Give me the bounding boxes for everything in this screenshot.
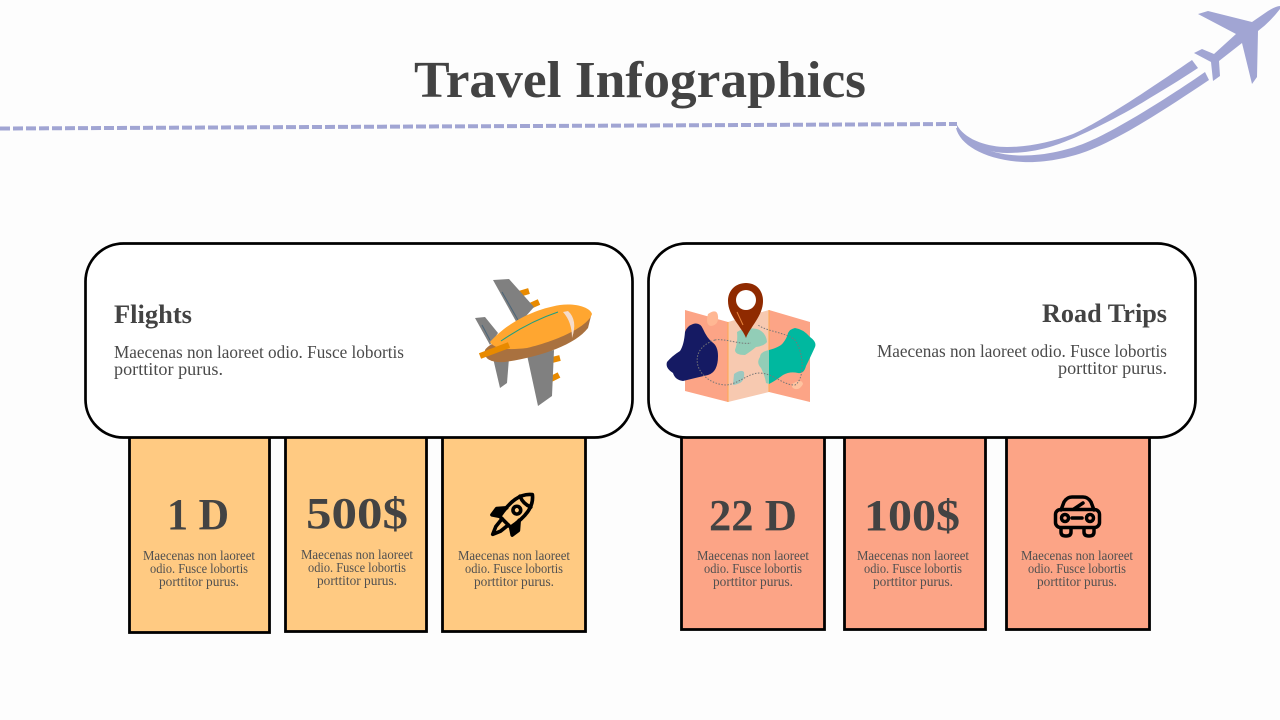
card: rocket: Maecenas non laoreet bbox=[458, 548, 570, 563]
icon: map with pin bbox=[667, 283, 815, 402]
card: 22 D: Maecenas non laoreet bbox=[697, 548, 809, 563]
card: 22 D: odio. Fusce lobortis bbox=[704, 561, 802, 576]
card: 1 D: 1 D bbox=[167, 490, 229, 539]
lower trail bbox=[956, 72, 1209, 162]
card: car: Maecenas non laoreet bbox=[1021, 548, 1133, 563]
text: road trips description bbox=[877, 341, 1167, 378]
card: 500$: odio. Fusce lobortis bbox=[308, 560, 406, 575]
card: 100$: odio. Fusce lobortis bbox=[864, 561, 962, 576]
text: flights description: porttitor purus. bbox=[114, 359, 223, 379]
card: 22 D bbox=[682, 437, 824, 630]
card: 1 D: Maecenas non laoreet bbox=[143, 548, 255, 563]
card: 500$: Maecenas non laoreet bbox=[301, 547, 413, 562]
text: flights description: Maecenas non laoreet odio. Fusce lobortis bbox=[114, 342, 404, 362]
card: 22 D: porttitor purus. bbox=[713, 574, 793, 589]
cards: road trips bbox=[682, 437, 1150, 630]
text: road trips description: Maecenas non laoreet odio. Fusce lobortis bbox=[877, 341, 1167, 361]
card: 22 D: 22 D bbox=[709, 491, 797, 540]
icon: location pin bbox=[728, 283, 763, 338]
cards: flights bbox=[130, 437, 586, 632]
card: 1 D bbox=[130, 437, 270, 632]
card: 100$: Maecenas non laoreet bbox=[857, 548, 969, 563]
panel: road trips bbox=[648, 244, 1196, 438]
title: Travel Infographics bbox=[414, 52, 866, 109]
card: rocket: porttitor purus. bbox=[474, 574, 554, 589]
card: car bbox=[1006, 437, 1150, 630]
card: 1 D: odio. Fusce lobortis bbox=[150, 561, 248, 576]
heading: road trips: Road Trips bbox=[1042, 299, 1167, 328]
card: rocket: odio. Fusce lobortis bbox=[465, 561, 563, 576]
card: 500$: porttitor purus. bbox=[317, 573, 397, 588]
card: 500$ bbox=[286, 437, 426, 632]
text: road trips description: porttitor purus. bbox=[1058, 358, 1167, 378]
text: flights description bbox=[114, 342, 404, 379]
icon: rocket bbox=[482, 484, 543, 545]
icon: orange airplane bbox=[475, 279, 592, 406]
panel: flights bbox=[86, 244, 632, 438]
card: car: odio. Fusce lobortis bbox=[1028, 561, 1126, 576]
icon: airplane with trails bbox=[956, 6, 1280, 162]
upper trail bbox=[957, 60, 1198, 153]
heading: flights: Flights bbox=[114, 300, 192, 329]
card: 100$: porttitor purus. bbox=[873, 574, 953, 589]
card: rocket bbox=[442, 437, 586, 632]
card: car: porttitor purus. bbox=[1037, 574, 1117, 589]
airplane silhouette bbox=[1194, 6, 1280, 84]
dashed flight path bbox=[0, 124, 957, 128]
card: 100$ bbox=[844, 437, 986, 630]
icon: car bbox=[1056, 497, 1100, 536]
card: 500$: 500$ bbox=[306, 489, 408, 538]
card: 100$: 100$ bbox=[864, 491, 960, 540]
card: 1 D: porttitor purus. bbox=[159, 574, 239, 589]
